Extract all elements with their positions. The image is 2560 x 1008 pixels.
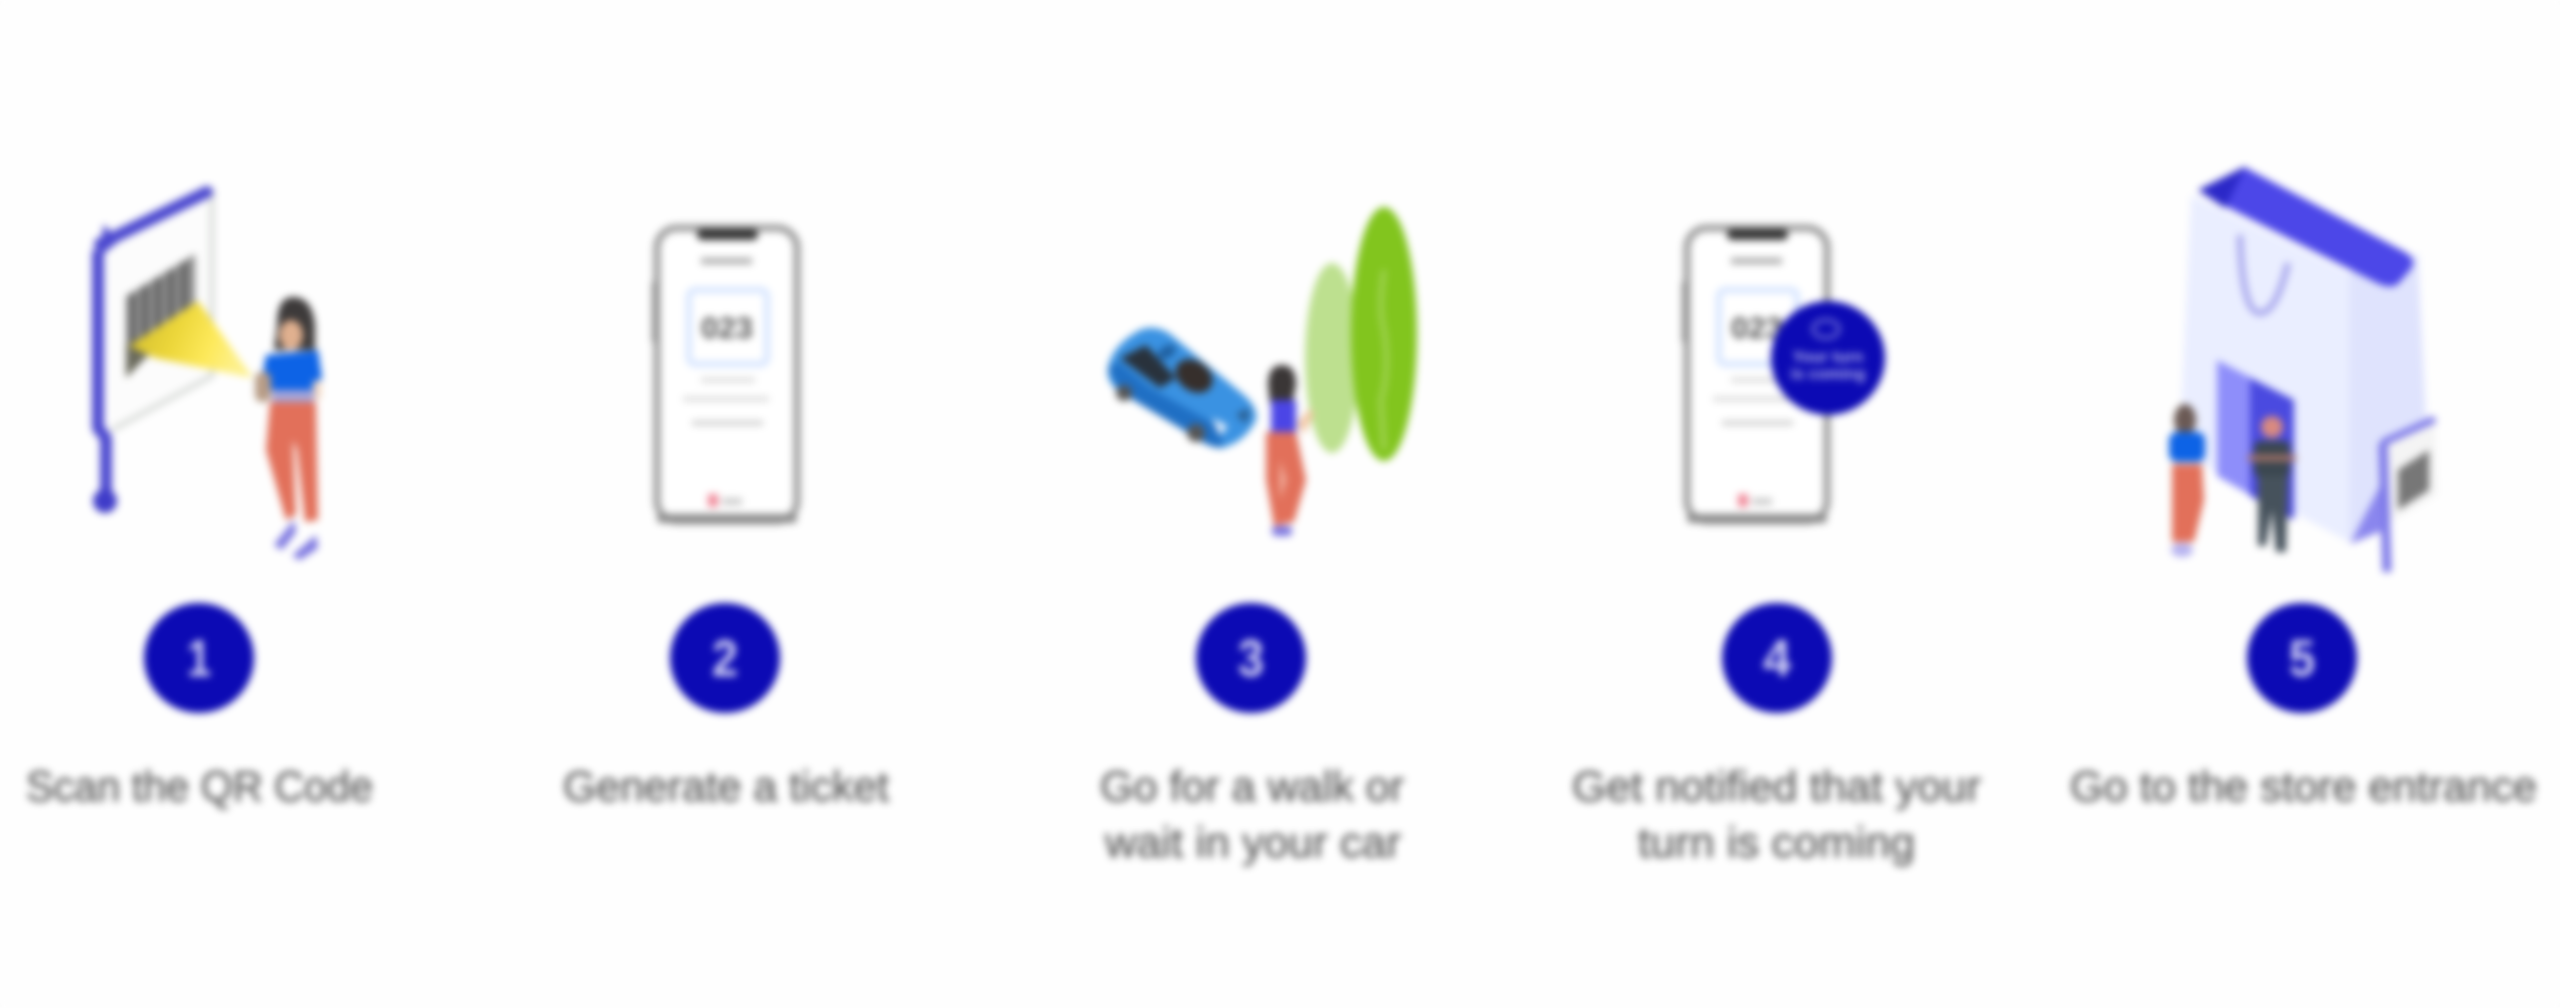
icon: woman scanning xyxy=(255,297,322,560)
step 3 label, second line: wait in your car xyxy=(1104,819,1401,867)
icon: light green bush xyxy=(1305,263,1359,453)
step 5 number badge: 5 xyxy=(2289,630,2315,688)
icon: phone with ticket number xyxy=(1682,228,1827,523)
step 4 number badge: 4 xyxy=(1763,630,1791,688)
icon: sign board with QR code xyxy=(93,190,212,513)
step 3 number badge: 3 xyxy=(1238,630,1264,688)
icon: store attendant xyxy=(2248,416,2296,552)
icon: notification badge xyxy=(1771,301,1885,415)
icon: notification badge: is coming xyxy=(1791,366,1865,383)
step 2 number badge xyxy=(670,603,780,713)
icon: phone with ticket number: 023 xyxy=(701,312,753,345)
step 3 label: Go for a walk or xyxy=(1100,763,1404,811)
step 2: generate a ticket xyxy=(652,228,797,523)
step 1 number badge: 1 xyxy=(187,630,211,688)
step 4 number badge xyxy=(1722,603,1832,713)
icon: dark green bush xyxy=(1351,207,1417,461)
icon: small woman xyxy=(2169,404,2205,557)
step 4 label: Get notified that your xyxy=(1572,763,1981,811)
icon: QR sign stand xyxy=(2350,419,2437,572)
step 1 label: Scan the QR Code xyxy=(26,763,373,811)
icon: phone with ticket number: 023 xyxy=(1731,312,1783,345)
step 3 number badge xyxy=(1196,603,1306,713)
icon: blue car xyxy=(1108,328,1256,448)
icon: phone with ticket number xyxy=(652,228,797,523)
step 5 label: Go to the store entrance xyxy=(2070,763,2537,811)
icon: woman standing xyxy=(1266,365,1314,536)
step 1: scan the QR code xyxy=(93,190,322,560)
step 5 number badge xyxy=(2247,603,2357,713)
step 4 label, second line: turn is coming xyxy=(1638,819,1915,867)
icon: notification badge: Your turn xyxy=(1793,349,1863,366)
step 1 number badge xyxy=(144,603,254,713)
step 2 label: Generate a ticket xyxy=(563,763,889,811)
step 3: go for a walk or wait in your car xyxy=(1108,207,1417,536)
step 4: get notified xyxy=(1682,228,1885,523)
icon: yellow scanner beam xyxy=(129,301,253,378)
step 5: go to the store entrance xyxy=(2169,166,2437,572)
icon: shopping bag store xyxy=(2179,166,2426,542)
step 2 number badge: 2 xyxy=(712,630,738,688)
